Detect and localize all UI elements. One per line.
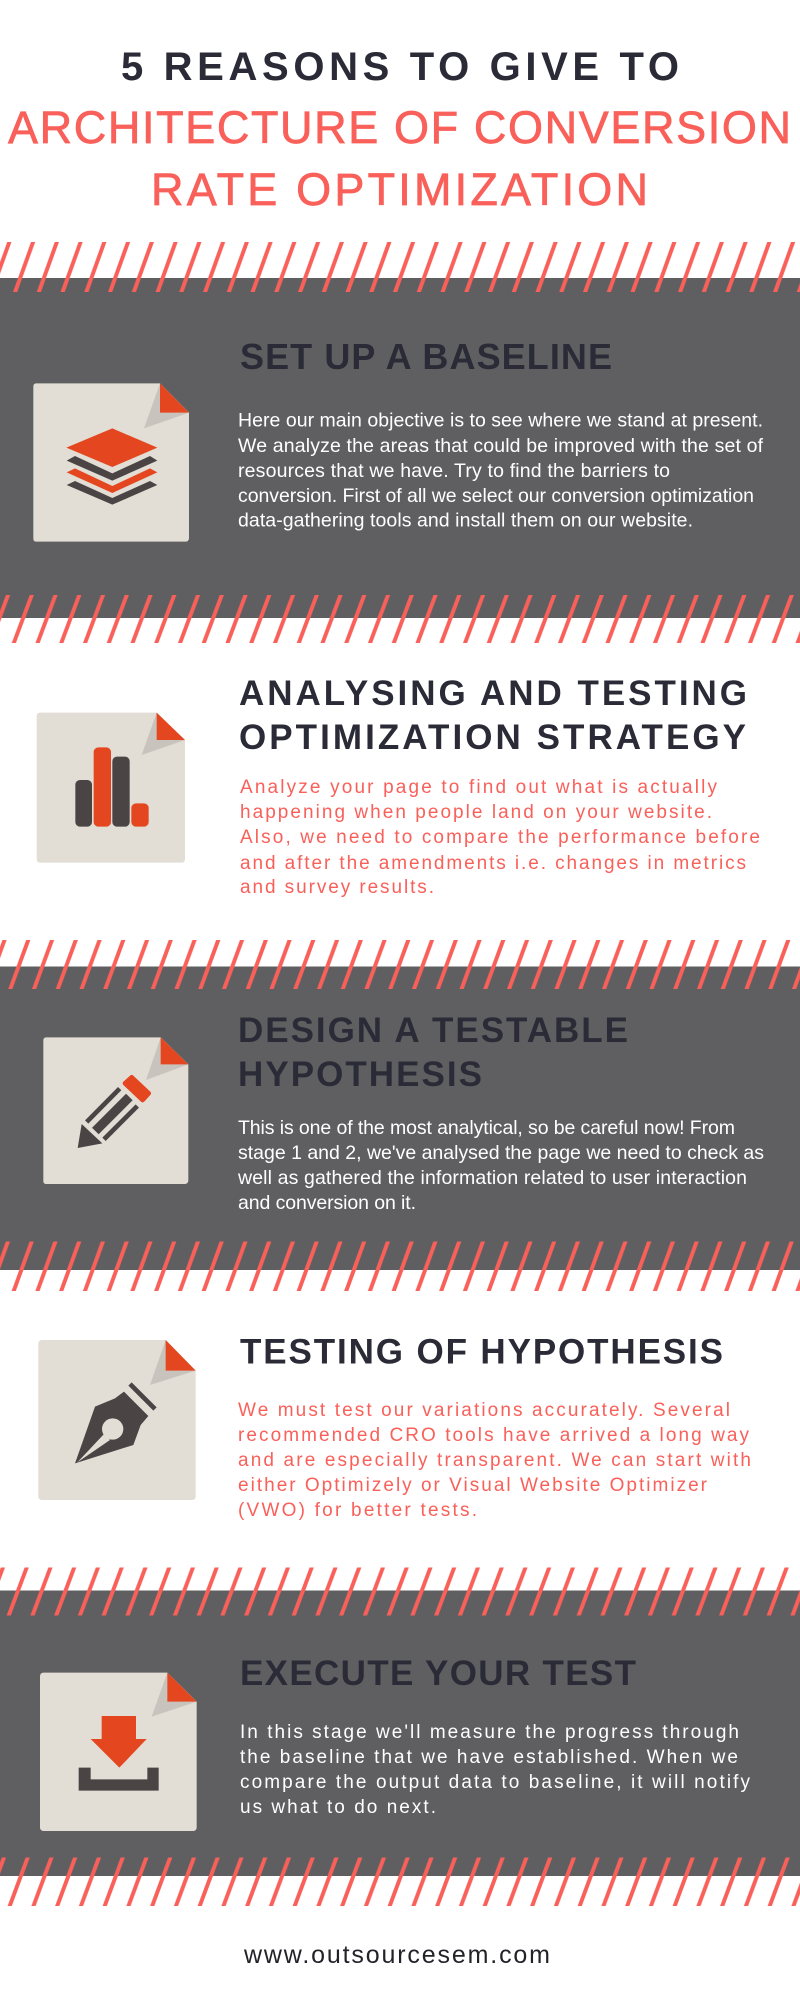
heading: execute your test: EXECUTE YOUR TEST — [240, 1654, 636, 1693]
panel: execute your test — [0, 1590, 800, 1876]
title line 1: 5 REASONS TO GIVE TO — [121, 45, 679, 89]
title line 2: ARCHITECTURE OF CONVERSION — [8, 102, 791, 153]
title — [8, 45, 791, 215]
heading: set up a baseline: SET UP A BASELINE — [240, 336, 612, 377]
heading: design a testable hypothesis — [238, 1011, 628, 1094]
panel: set up a baseline — [0, 278, 800, 618]
body text: analysing: and after the amendments i.e. changes in metrics — [240, 853, 746, 874]
body text: testing: and are especially transparent. We can start with — [238, 1450, 751, 1471]
body text: hypothesis: This is one of the most analytical, so be careful now! From — [238, 1117, 735, 1139]
panel: design a testable hypothesis — [0, 966, 800, 1270]
body text: execute: us what to do next. — [240, 1797, 436, 1818]
body text: execute — [240, 1722, 750, 1818]
heading: design a testable hypothesis: HYPOTHESIS — [238, 1055, 482, 1094]
body text: analysing: Analyze your page to find out what is actually — [240, 777, 718, 798]
body text: execute: compare the output data to baseline, it will notify — [240, 1772, 750, 1793]
body text: testing: either Optimizely or Visual Website Optimizer — [238, 1475, 708, 1496]
body text: testing: (VWO) for better tests. — [238, 1500, 477, 1521]
stripe band 5 — [0, 1568, 800, 1616]
stripe band 3 — [0, 940, 800, 989]
body text: hypothesis: well as gathered the information related to user interaction — [237, 1167, 747, 1189]
body text: analysing: Also, we need to compare the performance before — [240, 827, 760, 848]
body text: hypothesis: and conversion on it. — [238, 1192, 416, 1214]
heading: analysing and testing: OPTIMIZATION STRATEGY — [239, 718, 746, 757]
heading: analysing and testing — [239, 674, 747, 757]
heading: testing of hypothesis: TESTING OF HYPOTHESIS — [240, 1332, 723, 1372]
body text: baseline: resources that we have. Try to find the barriers to — [238, 460, 670, 482]
footer url: www.outsourcesem.com — [243, 1941, 550, 1969]
body text: testing: We must test our variations accurately. Several — [238, 1400, 730, 1421]
icon: pencil document — [43, 1037, 188, 1184]
panel: analysing and testing — [37, 674, 760, 898]
body text: hypothesis: stage 1 and 2, we've analysed the page we need to check as — [238, 1142, 764, 1164]
icon: pen nib document — [38, 1340, 196, 1500]
title line 3: RATE OPTIMIZATION — [151, 164, 648, 215]
body text: execute: In this stage we'll measure the progress through — [240, 1722, 739, 1743]
stripe band 2 — [0, 595, 800, 643]
body text: hypothesis — [237, 1117, 764, 1214]
body text: baseline: We analyze the areas that could be improved with the set of — [238, 435, 764, 457]
body text: baseline: conversion. First of all we select our conversion optimization — [238, 485, 754, 507]
stripe band 4 — [0, 1242, 800, 1291]
body text: baseline: Here our main objective is to see where we stand at present. — [238, 410, 763, 432]
icon: download document — [40, 1673, 197, 1831]
body text: analysing — [240, 777, 760, 898]
panel: testing of hypothesis — [38, 1332, 751, 1521]
stripe band 1 — [0, 242, 800, 292]
icon: bar chart document — [37, 713, 185, 863]
body text: testing: recommended CRO tools have arrived a long way — [238, 1425, 750, 1446]
body text: analysing: happening when people land on your website. — [240, 802, 712, 823]
heading: design a testable hypothesis: DESIGN A TESTABLE — [238, 1011, 628, 1050]
stripe band 6 — [0, 1858, 800, 1906]
body text: baseline: data-gathering tools and install them on our website. — [238, 510, 693, 532]
body text: testing — [238, 1400, 751, 1521]
body text: baseline — [238, 410, 764, 532]
body text: execute: the baseline that we have established. When we — [240, 1747, 738, 1768]
heading: analysing and testing: ANALYSING AND TESTING — [239, 674, 747, 713]
body text: analysing: and survey results. — [240, 877, 434, 898]
icon: layers document — [33, 383, 189, 542]
